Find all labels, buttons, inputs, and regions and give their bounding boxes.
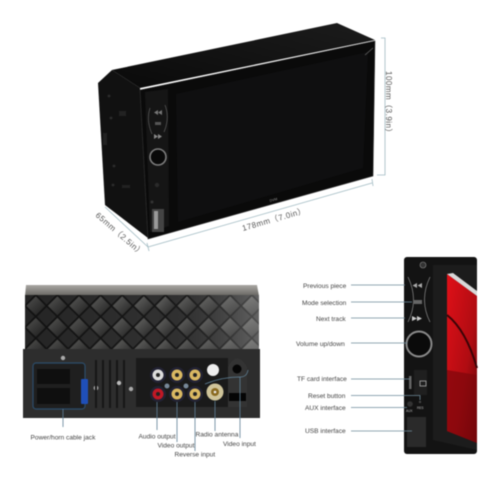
AUX and reset: AUX (406, 409, 413, 413)
volume knob (406, 332, 432, 356)
label: TF card: TF card interface (297, 376, 347, 383)
label: reverse input: Reverse input (174, 452, 215, 458)
label: video output: Video output (158, 442, 195, 450)
label: USB: USB interface (305, 428, 346, 435)
callout lines (351, 285, 420, 431)
callout lines (63, 370, 248, 451)
device top face (112, 23, 375, 88)
control button group (408, 262, 430, 322)
depth dimension line (105, 207, 148, 247)
label: previous piece: Previous piece (303, 283, 347, 290)
RCA ports (136, 358, 228, 407)
device side holes (103, 95, 130, 188)
screen with red image (433, 265, 477, 450)
control strip (145, 89, 169, 232)
radio antenna port (206, 364, 224, 400)
heat sink top band (25, 285, 259, 296)
control panel body (404, 257, 477, 454)
label: AUX: AUX interface (305, 405, 346, 412)
label: radio antenna: Radio antenna (196, 432, 239, 438)
product photo: front controls detail (296, 257, 477, 454)
USB port (407, 417, 426, 447)
width dimension line (147, 179, 373, 251)
label: video input: Video input (223, 441, 256, 448)
power jack (33, 356, 98, 409)
device side face (98, 70, 148, 238)
label: mode selection: Mode selection (302, 300, 347, 307)
label: height: 100mm（3.9in） (384, 71, 393, 137)
label: audio output: Audio output (138, 434, 176, 440)
screen label: DVM (269, 197, 278, 203)
TF slot (409, 370, 427, 395)
connector plate (23, 349, 260, 418)
label: volume: Volume up/down (296, 341, 345, 348)
video input jack (228, 358, 247, 407)
vent slots (96, 360, 124, 408)
product photo: head unit front with dimensions (94, 23, 393, 258)
label: next track: Next track (316, 316, 346, 323)
label: reset: Reset button (308, 393, 346, 400)
label: power jack: Power/horn cable jack (30, 434, 96, 442)
screen (176, 52, 368, 222)
label: width: 178mm（7.0in） (241, 206, 307, 233)
AUX and reset (406, 401, 424, 413)
AUX and reset: RES (417, 406, 424, 410)
bezel corner highlight (365, 48, 373, 55)
height dimension line (377, 38, 385, 175)
product photo: rear panel (23, 285, 260, 458)
diamond heat sink (25, 295, 259, 349)
label: depth: 65mm（2.5in） (94, 211, 146, 258)
device front bezel (140, 41, 375, 239)
